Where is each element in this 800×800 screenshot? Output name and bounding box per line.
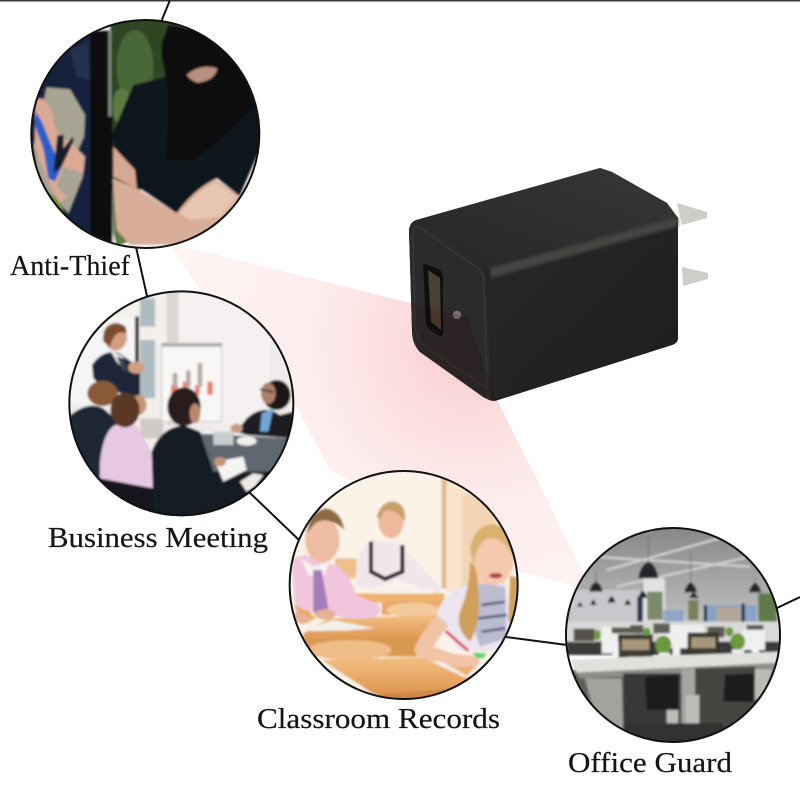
monitors xyxy=(619,635,652,657)
connector lines xyxy=(136,0,800,645)
charger top face xyxy=(418,168,678,270)
plants xyxy=(655,636,671,654)
charger side face xyxy=(487,220,678,400)
panel: Anti-Thief xyxy=(10,13,273,282)
label: Office Guard: Office Guard xyxy=(568,747,733,779)
boy xyxy=(292,555,380,619)
circle outline xyxy=(290,471,518,699)
panel: Business Meeting xyxy=(48,285,303,554)
label: Anti-Thief: Anti-Thief xyxy=(10,250,130,282)
front desk xyxy=(322,657,482,695)
photo: pupils at desks xyxy=(285,465,525,705)
circle outline xyxy=(31,20,259,248)
girl xyxy=(435,583,512,652)
product: USB charger camera xyxy=(409,168,708,401)
icon: upper plug prong xyxy=(677,203,707,225)
photo: burglar breaking window xyxy=(30,19,260,249)
panel: Office Guard xyxy=(565,527,781,772)
desk xyxy=(572,668,774,729)
panel: Classroom Records xyxy=(257,465,525,735)
icon: pendant lamps xyxy=(577,562,761,607)
circle outline xyxy=(566,528,780,742)
label: Classroom Records: Classroom Records xyxy=(257,703,500,735)
projection cone xyxy=(170,243,592,590)
photo: people in a meeting xyxy=(60,285,303,518)
icon: USB port xyxy=(423,263,443,336)
label: Business Meeting: Business Meeting xyxy=(48,522,268,554)
middle desk xyxy=(303,615,442,640)
charger front face xyxy=(409,221,490,399)
icon: camera lens LED xyxy=(453,311,461,319)
back pupil xyxy=(356,540,442,594)
circle outline xyxy=(69,291,293,515)
charger body silhouette xyxy=(409,168,678,401)
photo: open office xyxy=(565,527,781,743)
icon: lower plug prong xyxy=(682,267,708,286)
